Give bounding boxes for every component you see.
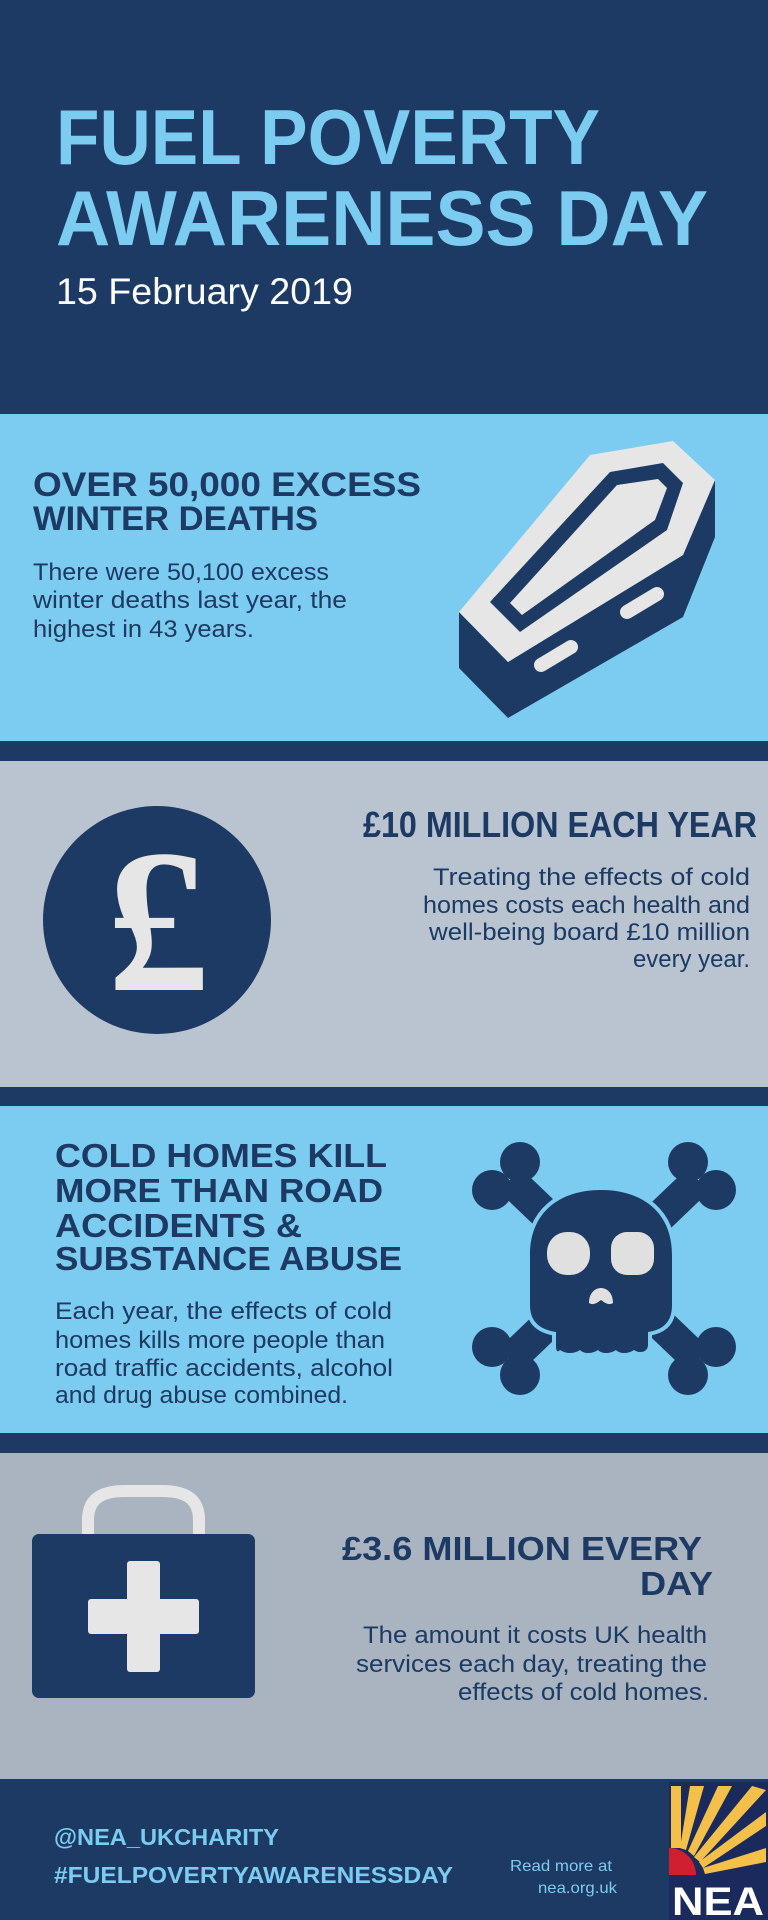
body 2: Treating the effects of cold: [433, 864, 750, 891]
body 1: winter deaths last year, the: [32, 587, 347, 614]
body 4: [356, 1622, 709, 1706]
footer: [54, 1782, 768, 1920]
heading 3: SUBSTANCE ABUSE: [55, 1240, 402, 1277]
panel: excess winter deaths: [0, 414, 768, 741]
body 2: well-being board £10 million: [428, 919, 750, 946]
body 4: The amount it costs UK health: [363, 1622, 707, 1649]
social handles: #FUELPOVERTYAWARENESSDAY: [54, 1862, 453, 1888]
title: AWARENESS DAY: [56, 174, 708, 262]
heading 1: OVER 50,000 EXCESS: [33, 466, 421, 504]
heading 3: COLD HOMES KILL: [55, 1137, 387, 1174]
heading 4: [342, 1530, 713, 1602]
title: FUEL POVERTY: [56, 93, 600, 181]
icon: pound coin: £: [107, 808, 209, 1035]
panel: 3.6 million every day: [0, 1453, 768, 1779]
body 1: There were 50,100 excess: [33, 559, 329, 586]
body 3: homes kills more people than: [55, 1327, 385, 1354]
social handles: @NEA_UKCHARITY: [54, 1824, 279, 1850]
heading 1: WINTER DEATHS: [33, 500, 318, 538]
body 4: services each day, treating the: [356, 1651, 707, 1678]
body 2: [423, 864, 750, 973]
icon: coffin: [459, 441, 715, 718]
body 1: highest in 43 years.: [33, 616, 254, 643]
heading 3: MORE THAN ROAD: [55, 1172, 383, 1209]
body 2: homes costs each health and: [423, 892, 750, 919]
read more: [510, 1858, 618, 1897]
read more: nea.org.uk: [538, 1880, 618, 1897]
body 2: every year.: [633, 946, 750, 973]
body 3: road traffic accidents, alcohol: [55, 1355, 393, 1382]
date: 15 February 2019: [56, 271, 353, 312]
title: [56, 93, 708, 262]
heading 1: [33, 466, 421, 538]
heading 4: £3.6 MILLION EVERY: [342, 1530, 702, 1567]
logo: NEA: [669, 1782, 768, 1920]
social handles: [54, 1824, 453, 1888]
panel: cold homes kill: [0, 1106, 768, 1433]
body 3: and drug abuse combined.: [55, 1382, 348, 1409]
body 1: [32, 559, 347, 643]
icon: medical bag: [32, 1491, 255, 1698]
read more: Read more at: [510, 1858, 613, 1875]
header: [56, 93, 708, 312]
heading 4: DAY: [640, 1565, 713, 1602]
panel: 10 million each year: [0, 761, 768, 1087]
body 3: Each year, the effects of cold: [55, 1298, 392, 1325]
icon: pound coin: [43, 806, 271, 1035]
body 3: [55, 1298, 393, 1409]
icon: skull and crossbones: [472, 1142, 736, 1395]
heading 3: [55, 1137, 402, 1277]
heading 3: ACCIDENTS &: [55, 1207, 302, 1244]
body 4: effects of cold homes.: [458, 1679, 709, 1706]
